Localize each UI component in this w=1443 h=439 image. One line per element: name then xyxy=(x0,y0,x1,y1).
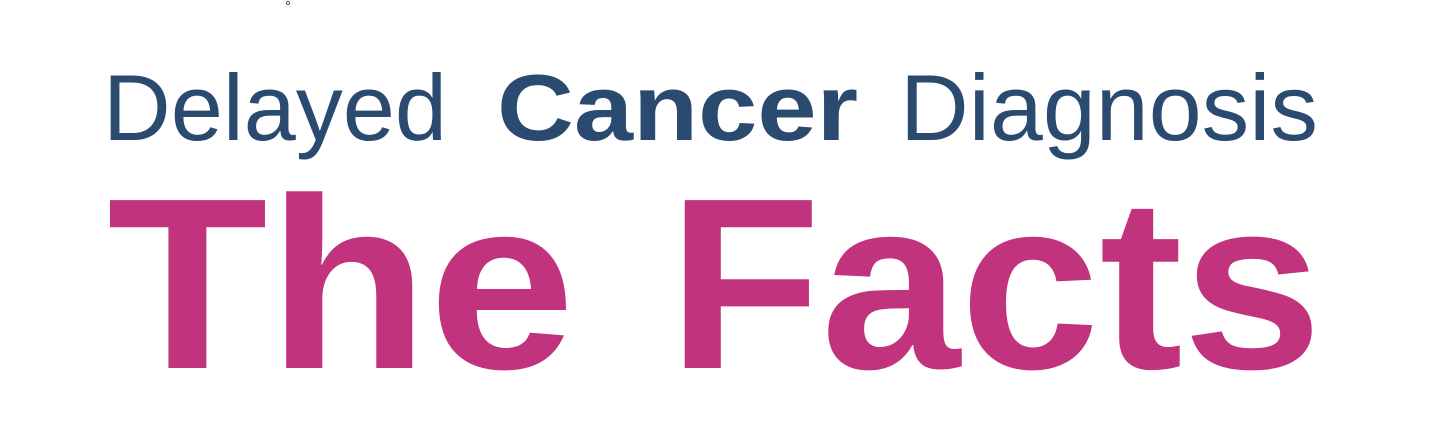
heading line 1: Delayed Cancer Diagnosis: Diagnosis xyxy=(900,55,1318,160)
heading line 2: The Facts xyxy=(107,147,1322,420)
decorative small dot xyxy=(286,2,290,4)
heading line 1: Delayed Cancer Diagnosis xyxy=(103,55,1318,160)
heading line 1: Delayed Cancer Diagnosis: Cancer xyxy=(497,55,858,160)
heading line 2: The Facts: The xyxy=(107,147,575,420)
heading line 1: Delayed Cancer Diagnosis: Delayed xyxy=(103,55,447,160)
heading line 2: The Facts: Facts xyxy=(668,147,1322,420)
